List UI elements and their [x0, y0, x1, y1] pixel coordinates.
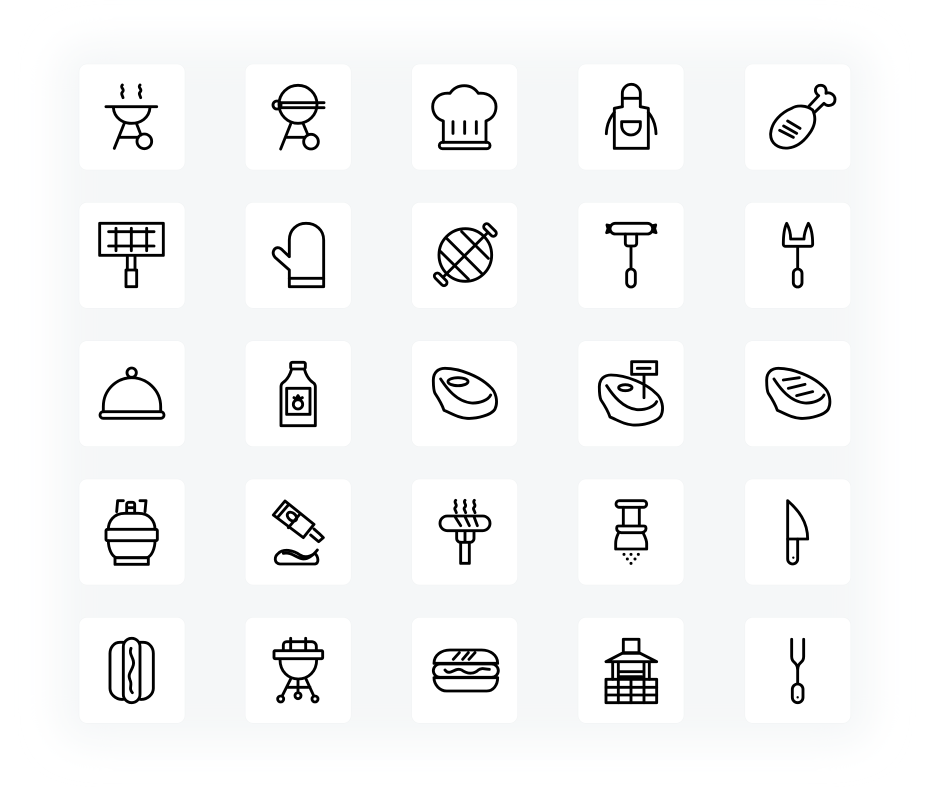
icon: charcoal kettle on legs: [274, 638, 323, 702]
icon: knife: [788, 501, 808, 564]
icon: sandwich: [433, 650, 498, 691]
icon: two-prong fork: [792, 639, 804, 703]
card: brick barbecue: [578, 617, 684, 723]
card: kettle grill: [245, 64, 351, 170]
icon: grilled steak: [767, 368, 830, 418]
icon: sausage on a fork with steam: [440, 500, 490, 563]
card: sausage on fork: [578, 202, 684, 308]
icon: drumstick: [771, 85, 835, 148]
card: chef hat: [412, 64, 518, 170]
card: two-prong fork: [745, 617, 851, 723]
icon: pepper mill: [616, 501, 647, 565]
icon: carving fork: [783, 223, 813, 287]
card: steak with thermometer tag: [578, 341, 684, 447]
card: cloche: [79, 341, 185, 447]
card: ketchup bottle: [245, 341, 351, 447]
card: sandwich: [412, 617, 518, 723]
card: t-bone steak: [412, 341, 518, 447]
card: mustard tube: [245, 479, 351, 585]
icon: ketchup bottle: [281, 362, 315, 426]
icon: charcoal grill: [106, 85, 157, 149]
card: round grill basket: [412, 202, 518, 308]
card: gas tank: [79, 479, 185, 585]
card: grilled steak: [745, 341, 851, 447]
icon: hot dog: [110, 638, 153, 703]
icon: sausage on fork: [607, 223, 656, 287]
card: hot dog: [79, 617, 185, 723]
background glow: [58, 44, 872, 744]
card: grill grate: [79, 202, 185, 308]
icon: grill grate: [100, 223, 163, 287]
icon: cloche: [100, 368, 164, 418]
icon: chef hat: [433, 86, 496, 149]
icon: mustard tube: [273, 501, 323, 564]
icon: gas tank: [106, 501, 157, 564]
icon: apron: [606, 84, 656, 148]
card: charcoal grill with steam: [79, 64, 185, 170]
card: pepper mill: [578, 479, 684, 585]
card: drumstick: [745, 64, 851, 170]
icon: round grill basket: [433, 222, 498, 287]
card: apron: [578, 64, 684, 170]
icon: oven mitt: [273, 223, 324, 287]
icon: t-bone steak: [433, 368, 497, 418]
icon: steak with thermometer tag: [599, 362, 663, 425]
icon: kettle grill: [273, 85, 324, 149]
card: charcoal kettle on legs: [245, 617, 351, 723]
card: carving fork: [745, 202, 851, 308]
card: sausage on a fork with steam: [412, 479, 518, 585]
card: knife: [745, 479, 851, 585]
card: oven mitt: [245, 202, 351, 308]
icon: brick barbecue: [606, 639, 657, 703]
